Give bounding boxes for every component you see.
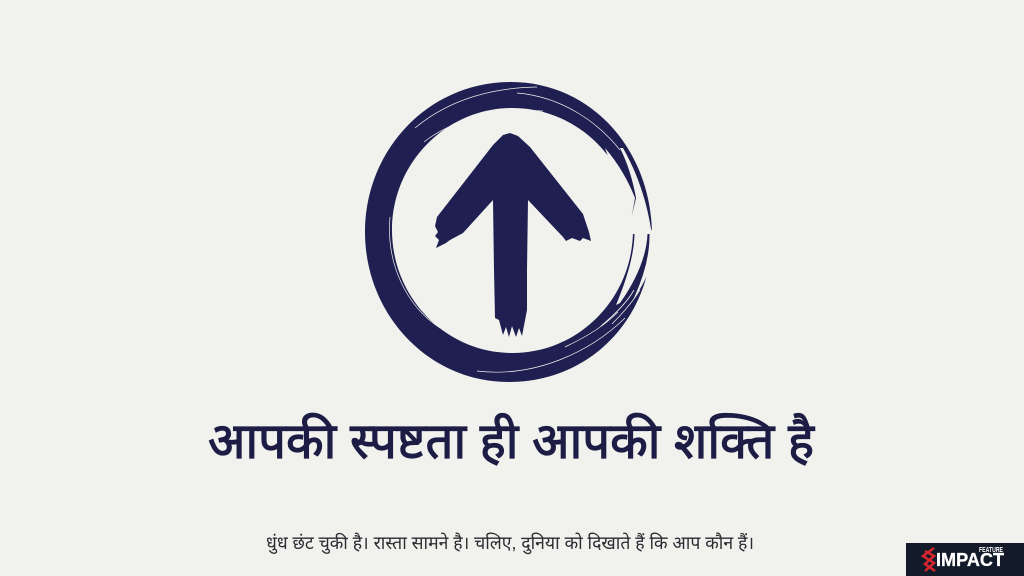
brush ring: [365, 82, 656, 382]
brush gap: lower right inner: [616, 234, 648, 305]
brush gap: inner edge taper: [605, 148, 635, 215]
brush arrow: [435, 133, 591, 337]
logo: Impact Feature: [906, 543, 1024, 576]
subtitle: धुंध छंट चुकी है। रास्ता सामने है। चलिए, दुनिया को दिखाते हैं कि आप कौन हैं।: [266, 532, 754, 555]
logo text: FEATURE: [979, 547, 1003, 554]
logo text: IMPACT: [936, 550, 1004, 570]
icon: brush ring with up arrow: [365, 82, 656, 382]
title: आपकी स्पष्टता ही आपकी शक्ति है: [208, 413, 815, 469]
brush gap: upper right: [620, 148, 654, 234]
brush gap: lower right outer: [632, 234, 656, 302]
logo icon: red DNA helix: [923, 548, 935, 571]
